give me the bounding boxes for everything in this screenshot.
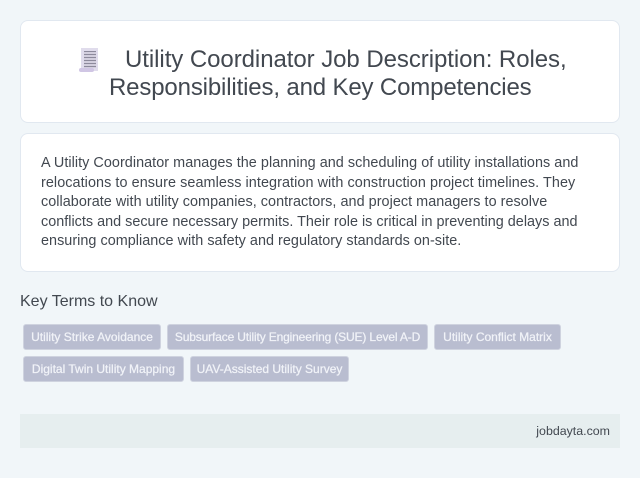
panel: title card <box>20 20 620 123</box>
panel: description card <box>20 133 620 272</box>
text: description line 2: relocations to ensure seamless integration with construction project timelines. They <box>41 175 575 191</box>
tag: subsurface utility engineering <box>167 324 428 350</box>
tag: utility strike avoidance <box>23 324 161 350</box>
text: description line 5: ensuring compliance with safety and regulatory standards on-site. <box>41 233 461 249</box>
text: footer site name: jobdayta.com <box>536 424 610 438</box>
tag: utility conflict matrix: Utility Conflict Matrix <box>443 330 552 344</box>
text: description line 3: collaborate with utility companies, contractors, and project managers to resolve <box>41 194 547 210</box>
text: description line 1: A Utility Coordinator manages the planning and scheduling of utility installations and <box>41 155 578 171</box>
icon: document scroll <box>79 48 98 72</box>
tag: digital twin utility mapping <box>23 356 184 382</box>
heading: key terms: Key Terms to Know <box>20 293 158 310</box>
tag: utility strike avoidance: Utility Strike Avoidance <box>31 330 153 344</box>
heading: title line 2: Responsibilities, and Key Competencies <box>109 74 532 101</box>
footer bar <box>20 414 620 448</box>
text: description line 4: conflicts and secure necessary permits. Their role is critical in preventing delays and <box>41 214 578 230</box>
tag: subsurface utility engineering: Subsurface Utility Engineering (SUE) Level A-D <box>175 330 420 344</box>
tag: utility conflict matrix <box>434 324 561 350</box>
heading: title line 1: Utility Coordinator Job Description: Roles, <box>125 46 567 73</box>
tag: uav-assisted utility survey: UAV-Assisted Utility Survey <box>197 362 342 376</box>
tag: digital twin utility mapping: Digital Twin Utility Mapping <box>32 362 175 376</box>
tag: uav-assisted utility survey <box>190 356 349 382</box>
